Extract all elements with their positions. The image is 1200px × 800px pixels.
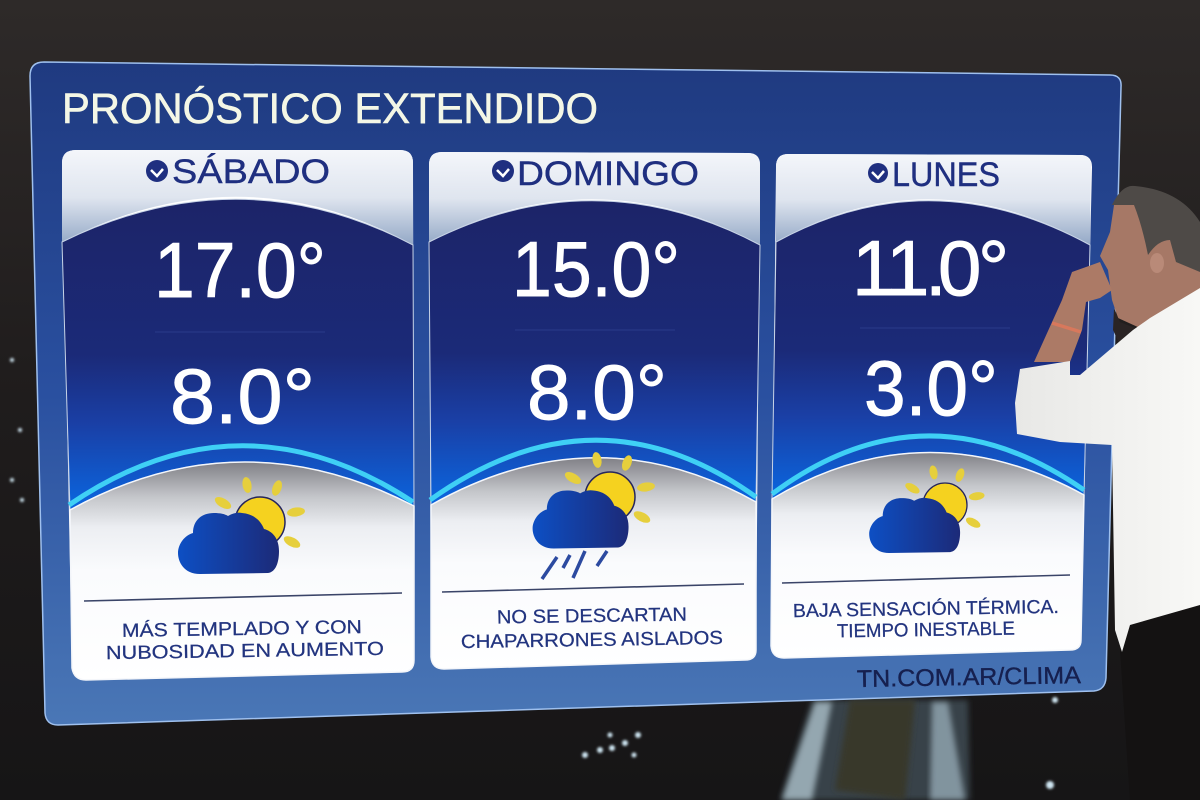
city lights at the bottom bbox=[10, 358, 1058, 800]
icon: sun behind cloud with rain bbox=[533, 451, 656, 579]
icon: down chevron badge bbox=[492, 160, 514, 182]
icon: sun behind cloud bbox=[869, 465, 985, 553]
icon: sun behind cloud bbox=[178, 476, 306, 574]
caption: NUBOSIDAD EN AUMENTO bbox=[106, 639, 384, 664]
title: PRONÓSTICO EXTENDIDO bbox=[62, 85, 598, 133]
panel: forecast board bbox=[30, 62, 1121, 725]
day name: SÁBADO bbox=[172, 153, 330, 191]
neck and face bbox=[1100, 200, 1200, 328]
caption bbox=[106, 617, 384, 664]
website url: TN.COM.AR/CLIMA bbox=[857, 662, 1081, 693]
caption bbox=[793, 596, 1059, 642]
hair bbox=[1112, 186, 1200, 272]
min temperature: 3.0° bbox=[864, 344, 998, 432]
panel: sábado bbox=[62, 150, 414, 680]
icon: down chevron badge bbox=[868, 163, 888, 183]
caption: CHAPARRONES AISLADOS bbox=[461, 628, 723, 653]
panel: lunes bbox=[771, 154, 1092, 658]
min temperature: 8.0° bbox=[527, 348, 667, 436]
caption: NO SE DESCARTAN bbox=[497, 605, 687, 628]
day name: DOMINGO bbox=[517, 155, 699, 193]
beard shadow bbox=[1113, 308, 1140, 345]
caption: BAJA SENSACIÓN TÉRMICA. bbox=[793, 596, 1059, 622]
max temperature: 15.0° bbox=[512, 225, 680, 313]
caption bbox=[461, 605, 723, 653]
panel: domingo bbox=[429, 152, 760, 669]
presenter bbox=[1015, 186, 1200, 800]
day name: LUNES bbox=[892, 156, 1000, 194]
caption: TIEMPO INESTABLE bbox=[837, 619, 1015, 642]
trousers bbox=[1120, 605, 1200, 800]
ear bbox=[1150, 253, 1164, 273]
caption: MÁS TEMPLADO Y CON bbox=[122, 617, 362, 642]
white shirt bbox=[1015, 288, 1200, 652]
icon: down chevron badge bbox=[146, 160, 168, 182]
bracelet bbox=[1052, 323, 1081, 332]
max temperature: 17.0° bbox=[154, 226, 326, 314]
max temperature: 11.0° bbox=[852, 224, 1009, 312]
forearm and hand bbox=[1034, 262, 1112, 362]
min temperature: 8.0° bbox=[170, 352, 315, 440]
